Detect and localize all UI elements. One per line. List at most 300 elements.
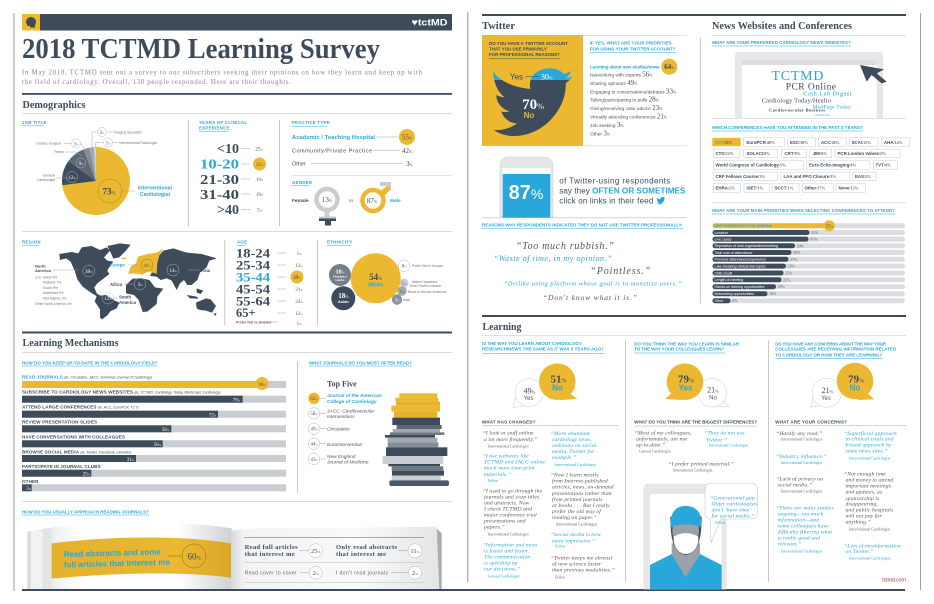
panel: reasons not to use twitter: “Too much rubbish.”	[516, 241, 614, 252]
panel: twitter priorities: 64%	[664, 63, 675, 71]
panel: conference priorities	[712, 208, 905, 303]
quotes: on Twitter.”	[846, 549, 874, 555]
panel: years of clinical experience: 19%	[256, 178, 264, 183]
panel: learning column 1: IS THE WAY YOU LEARN ABOUT CARDIOLOGY	[482, 341, 582, 346]
panel: practice type: 3%	[406, 160, 414, 168]
panel: learning column 3: DO YOU HAVE ANY CONCERNS ABOUT THE WAY YOUR	[775, 341, 887, 346]
bar chart: 31%	[127, 458, 135, 463]
panel: reasons not to use twitter: “Don't know what it is.”	[543, 293, 637, 302]
callout: speech bubble: “Generational gap.	[710, 494, 756, 501]
quotes: our decisions.”	[484, 567, 520, 573]
bar chart: 90%	[258, 383, 266, 388]
rounded bar chart: Late-breaking clinical trial topics	[714, 264, 766, 268]
quotes: articles, news, on-demand	[552, 485, 614, 491]
panel: age: 24%	[295, 300, 303, 305]
rounded bar chart: 42%	[811, 230, 819, 235]
rounded bar chart: 41%	[810, 237, 818, 242]
panel: ethnicity: Other Pacific Islander	[409, 284, 442, 288]
quotes: a lot more frequently.”	[484, 436, 538, 443]
rounded bar chart: Live cases	[714, 238, 732, 242]
quotes: “There are many studies	[776, 504, 834, 511]
quotes: International Cardiologist	[709, 444, 749, 448]
heading: demographics: Demographics	[22, 100, 86, 111]
quotes: The communication	[484, 555, 530, 561]
panel: approach to reading journals: that interest me	[245, 551, 295, 558]
speech bubbles: 49 yes 51 no: No	[552, 384, 563, 392]
panel: journals top five: EuroIntervention	[327, 442, 363, 448]
quotes: “Lots of misinformation	[844, 542, 901, 549]
quotes: media, Twitter for	[552, 448, 595, 455]
pie chart: 73%	[102, 186, 116, 196]
conference tags: CTO/12%	[716, 151, 734, 156]
bar chart	[22, 377, 286, 492]
panel: age: 45-54	[236, 282, 271, 296]
panel: approach to reading journals: 60%	[187, 552, 201, 562]
illustration: laptop browser: MedPage Today	[813, 104, 851, 110]
conference tags: TCT/48%	[715, 140, 733, 145]
panel: region map: South 9%	[43, 286, 58, 290]
panel: approach to reading journals: Read abstracts and some	[64, 547, 162, 559]
panel: region map: America	[119, 300, 137, 305]
quotes: “Twitter keeps me abreast	[551, 554, 613, 561]
quotes: journals and scan titles	[483, 494, 539, 500]
panel: twitter priorities: Sharing opinions 49%	[590, 79, 638, 87]
callout: speech bubble: Fellow	[715, 521, 726, 525]
panel: region map: REGION	[22, 240, 41, 244]
panel: approach to reading journals: full articles that interest me	[64, 558, 171, 569]
panel: years of clinical experience: EXPERIENCE	[199, 126, 230, 130]
pie labels: 3%	[74, 142, 79, 148]
pie labels: 2%	[100, 131, 105, 136]
panel: phone 87 percent: click on links in their feed	[559, 196, 653, 206]
panel: conferences attended: WHICH CONFERENCES HAVE YOU ATTENDED IN THE PAST 3 YEARS?	[712, 125, 863, 130]
icon: twitter bird chart	[493, 68, 572, 136]
panel: keep up to date bars	[22, 360, 286, 492]
panel: approach to reading journals	[22, 509, 442, 589]
quotes: up-to-date.”	[636, 442, 665, 448]
panel: learning column 2: WHAT DO YOU THINK ARE THE BIGGEST DIFFERENCES?	[634, 419, 757, 424]
quotes: Interventional Cardiologist	[781, 549, 823, 553]
panel: twitter priorities: Networking with experts 56%	[590, 71, 653, 79]
panel: learning column 2	[634, 342, 757, 589]
panel: twitter account: DO YOU HAVE A TWITTER ACCOUNT	[489, 41, 568, 46]
panel: age: 35-44	[236, 270, 271, 284]
quotes: Interventional Cardiologist	[556, 523, 598, 527]
conference tags: JIM/6%	[812, 151, 827, 156]
panel: approach to reading journals: I don't read journals	[336, 570, 388, 576]
panel: approach to reading journals: 2%	[412, 570, 418, 577]
panel: twitter priorities: Other 3%	[590, 129, 611, 137]
panel: twitter priorities	[583, 35, 687, 146]
quotes: “Hardly any read.”	[776, 430, 822, 437]
callout: speech bubble	[705, 484, 757, 543]
quotes: Fellow	[488, 479, 499, 483]
quotes: “Lack of privacy on	[776, 476, 823, 483]
panel: keep up to date bars: BROWSE SOCIAL MEDIA (ie, Twitter, Facebook, LinkedIn)	[22, 449, 131, 454]
panel: twitter priorities: Engaging in conversations/debates 33%	[590, 87, 677, 95]
panel: practice type: Other	[292, 162, 306, 168]
panel: keep up to date bars: HAVE CONVERSATIONS WITH COLLEAGUES	[22, 434, 125, 439]
rounded bar chart: 22%	[785, 271, 793, 276]
panel: conference priorities: WHAT ARE YOUR MAIN PRIORITIES WHEN SELECTING CONFERENCES TO ATTEND?	[712, 208, 895, 213]
map labels	[53, 265, 200, 298]
rounded bar chart: Networking opportunities	[714, 292, 754, 296]
conference tags: SCAI/15%	[852, 140, 871, 145]
panel: age: 29%	[293, 276, 301, 281]
conference tags: ESC/30%	[790, 140, 808, 145]
bar chart: 72%	[209, 414, 217, 418]
bubble chart: 18%	[338, 292, 349, 300]
conference tags: PCR London Valves/5%	[838, 151, 886, 156]
quotes: Fellow	[555, 545, 566, 549]
logo: ♥tctMD	[412, 18, 448, 28]
panel: learning column 3: TO CARDIOLOGY OR HOW THEY ARE LEARNING?	[775, 352, 882, 357]
panel: learning column 3	[775, 341, 907, 583]
panel: gender: GENDER	[292, 180, 313, 185]
bubble chart: Asian	[338, 299, 349, 304]
panel: job title	[22, 120, 173, 215]
bubble chart: 1%	[402, 282, 407, 287]
panel: twitter priorities: FOR USING YOUR TWITTER ACCOUNT?	[590, 46, 676, 51]
conference tags: ACC/26%	[821, 140, 840, 145]
rounded bar chart	[712, 220, 905, 303]
rounded bar chart: Hands-on training opportunities	[714, 285, 765, 289]
panel: job title: JOB TITLE	[22, 120, 47, 125]
conference tags: CRT/8%	[784, 151, 801, 156]
panel: age: 65+	[236, 306, 256, 320]
pie labels: Cardiac Surgeon	[36, 142, 62, 146]
panel: twitter account: FOR PROFESSIONAL REASONS?	[489, 52, 560, 57]
panel: region map: 3%	[138, 283, 143, 288]
panel: age: 21%	[295, 288, 303, 293]
rounded bar chart: 23%	[788, 264, 796, 269]
panel: twitter priorities: Job seeking 3%	[590, 121, 624, 129]
conference tags	[712, 138, 909, 192]
quotes: to clinical trials and	[846, 437, 894, 443]
panel: ethnicity: ETHNICITY	[327, 240, 352, 244]
panel: ethnicity: Arab	[403, 298, 410, 302]
illustration: laptop browser: Cardiovascular Business	[769, 108, 825, 113]
rounded bar chart: Previous attendance/experience	[714, 258, 766, 262]
quotes: “Social media is now	[551, 531, 601, 538]
illustration: laptop browser: TCTMD	[772, 69, 824, 84]
pie chart: 9%	[79, 162, 84, 167]
pie labels: Cardiologist	[140, 192, 170, 198]
panel: reasons not to use twitter: “Dislike using platform whose goal is to monetize users.”	[504, 281, 682, 288]
panel: practice type: PRACTICE TYPE	[292, 120, 330, 125]
quotes: more impressive.”	[552, 538, 595, 544]
speech bubbles: 79 yes 21 no: No	[709, 396, 717, 402]
panel: region map: U.S.–West 4%	[35, 276, 57, 280]
quotes: Interventional Cardiologist	[849, 528, 891, 532]
icon: brain head	[26, 17, 36, 28]
panel: journals top five: 62%	[310, 397, 318, 402]
panel: gender: vs	[349, 199, 353, 204]
quotes: “Superficial approach	[844, 430, 897, 437]
bubble chart: 54%	[369, 272, 382, 282]
panel: phone 87 percent: say they OFTEN OR SOMETIMES	[559, 186, 686, 196]
panel: journals top five: 44%	[310, 442, 318, 448]
quotes: “Not enough time	[844, 471, 886, 478]
quotes: sponsorship is	[846, 496, 879, 502]
conference tags: EAS/2%	[855, 174, 871, 179]
conference tags: LAA and PFO Closure/3%	[784, 174, 836, 179]
illustration: doctor on tablet	[643, 484, 727, 589]
panel: approach to reading journals: that interest me	[336, 551, 386, 558]
panel: ethnicity: Native Hawaiian/	[412, 280, 437, 284]
panel: twitter priorities: Virtually attending conferences 21%	[590, 112, 668, 120]
quotes: is faster and faster.	[484, 548, 529, 555]
quotes: example.”	[552, 455, 576, 461]
icon: male symbol: 87%	[367, 197, 378, 205]
speech bubbles: 49 yes 51 no	[513, 363, 577, 408]
quotes: biased approach by	[846, 443, 892, 449]
quotes: information—and	[778, 517, 819, 524]
pie labels	[36, 128, 173, 198]
speech bubbles: 21 yes 79 no	[811, 363, 874, 407]
quotes: some news sites.”	[846, 448, 887, 454]
panel: learning column 2: DO YOU THINK THE WAY YOU LEARN IS SIMILAR	[634, 342, 740, 347]
header bar with logo	[22, 14, 452, 30]
quotes: from printed journals	[552, 496, 602, 503]
speech bubbles: 49 yes 51 no: Yes	[524, 396, 533, 402]
panel: age: 12%	[295, 312, 303, 317]
quotes: International Cardiologist	[673, 468, 713, 472]
panel: practice type: Community/Private Practice	[292, 148, 372, 154]
panel: journals top five: New England	[327, 454, 356, 460]
rounded bar chart: 39%	[796, 243, 804, 248]
bubble chart: 8%	[402, 265, 407, 270]
icon: female symbol: 13%	[322, 196, 333, 204]
pie labels: Interventional	[138, 186, 173, 192]
panel: learning column 2: TO THE WAY YOUR COLLEAGUES LEARN?	[634, 347, 724, 352]
panel: preferred news websites: WHAT ARE YOUR PREFERRED CARDIOLOGY NEWS WEBSITES?	[712, 40, 851, 45]
quotes: or books . . . But I really	[552, 503, 610, 509]
panel: twitter account	[482, 35, 583, 146]
quotes: is speeding up	[484, 561, 518, 567]
illustration: laptop browser: Cardiology Today/Healio	[762, 97, 831, 104]
quotes: “Most of my colleagues,	[634, 429, 692, 436]
conference tags: TVT/4%	[876, 163, 891, 168]
panel: journals top five: Circulation	[327, 426, 350, 432]
pie labels: 1%	[106, 142, 111, 146]
panel: learning column 1: RESEARCH/NEWS THE SAME AS IT WAS 5 YEARS AGO?	[482, 347, 604, 352]
rounded bar chart: 16%	[769, 291, 777, 296]
quotes: “Industry influence.”	[776, 453, 827, 460]
quotes: unfortunately, are not	[636, 436, 687, 443]
quotes: Interventional Cardiologist	[555, 463, 597, 467]
panel: years of clinical experience: <10	[217, 142, 239, 157]
speech bubbles: 79 yes 21 no: 21%	[707, 386, 719, 395]
quotes: Fellow	[555, 575, 566, 579]
title: 2018 TCTMD Learning Survey	[22, 34, 380, 65]
panel: region map: Other North America 4%	[35, 302, 72, 306]
panel: region map: 12%	[104, 297, 112, 302]
speech bubbles: 79 yes 21 no: 79%	[678, 373, 694, 385]
pie labels: Interventional Radiologist	[119, 141, 157, 145]
panel: approach to reading journals: Read cover to cover	[245, 570, 297, 576]
quotes: presentations rather than	[551, 491, 612, 497]
panel: region map	[22, 240, 217, 319]
illustration: laptop browser: Cath Lab Digest	[803, 91, 852, 98]
quotes: and money to attend	[846, 478, 893, 484]
quotes: important meetings	[846, 484, 891, 490]
rounded bar chart: CME credit	[714, 271, 732, 275]
panel: twitter account: Yes	[510, 72, 523, 82]
quotes: much more than print	[484, 466, 535, 472]
panel: age: Prefer Not to Answer	[236, 320, 272, 324]
panel: keep up to date bars: OTHER	[22, 479, 39, 484]
quotes: “I prefer printed material.”	[668, 460, 734, 467]
bubble chart: Hispanic/	[333, 274, 347, 278]
panel: phone 87 percent: of Twitter-using respondents	[559, 176, 670, 186]
speech bubbles: 79 yes 21 no: Yes	[679, 384, 693, 393]
callout: speech bubble: Older cardiologists	[712, 502, 757, 508]
quotes: Interventional Cardiologist	[781, 490, 823, 494]
panel: journals top five	[308, 360, 449, 486]
panel: age: 18-24	[236, 246, 271, 260]
pie labels: Imaging Specialist	[114, 130, 142, 134]
quotes: major conference trial	[484, 512, 537, 519]
quotes: Twitter.”	[706, 437, 727, 443]
intro text: the field of cardiology. Overall, 130 people responded. Here are their thoughts.	[22, 78, 291, 86]
panel: years of clinical experience: 25%	[255, 148, 263, 152]
conference tags: CRF Fellows Course/3%	[716, 174, 765, 179]
quotes: is really good and	[778, 535, 820, 541]
panel: approach to reading journals: HOW DO YOU USUALLY APPROACH READING JOURNALS?	[22, 509, 149, 514]
panel: twitter account: No	[524, 111, 534, 120]
bar chart: 25%	[83, 472, 91, 478]
intro text	[22, 68, 422, 86]
heading: news websites and conferences: News Websites and Conferences	[712, 21, 852, 32]
panel: keep up to date bars: SUBSCRIBE TO CARDIOLOGY NEWS WEBSITES (ie, TCTMD, Cardiology Today, Medscape Cardiology)	[22, 390, 220, 395]
panel: journals top five: 43%	[310, 458, 318, 463]
quotes: of new science faster	[552, 560, 602, 567]
rounded bar chart: Length of meeting	[714, 278, 743, 282]
rounded bar chart: 4%	[732, 298, 738, 303]
speech bubbles: 49 yes 51 no: 51%	[550, 374, 567, 386]
conference tags: AHA/14%	[884, 140, 903, 145]
heading: learning mechanisms: Learning Mechanisms	[22, 338, 118, 349]
footer url: tctmd.com	[882, 577, 906, 583]
panel: journals top five: College of Cardiology	[327, 399, 377, 405]
panel: journals top five: Top Five	[327, 379, 357, 388]
quotes: will not pay for	[846, 513, 882, 520]
quotes: prefer the old way of	[551, 508, 602, 515]
panel: approach to reading journals: 2%	[313, 570, 319, 577]
panel: years of clinical experience: 10-20	[200, 158, 239, 172]
quotes: social media.”	[778, 483, 812, 489]
quotes	[634, 429, 749, 472]
rounded bar chart: Location	[714, 231, 728, 235]
rounded bar chart: 18%	[778, 284, 786, 289]
speech bubbles: 21 yes 79 no: No	[850, 384, 860, 393]
quotes: Interventional Cardiologist	[488, 444, 530, 448]
conference tags: None/13%	[838, 186, 859, 191]
quotes: “I use websites like	[483, 453, 529, 460]
panel: region map: Midwest 7%	[43, 280, 61, 284]
panel: preferred news websites	[712, 40, 887, 118]
panel: gender: Female	[292, 198, 309, 204]
bar chart: 58%	[162, 428, 170, 433]
heading: learning: Learning	[482, 322, 522, 333]
panel: region map: America	[35, 268, 52, 273]
quotes: TCTMD and JACC online	[484, 459, 545, 465]
conference tags: Euro Echo-Imaging/4%	[809, 163, 856, 168]
panel: twitter account: 30%	[541, 72, 553, 82]
panel: journals top five: WHAT JOURNALS DO YOU MOST OFTEN READ?	[309, 360, 412, 365]
quotes: reading on paper.”	[552, 515, 597, 521]
bubble chart: White	[368, 282, 383, 288]
panel: gender	[292, 180, 401, 226]
panel: learning column 3: WHAT ARE YOUR CONCERNS?	[775, 419, 847, 424]
panel: reasons not to use twitter: “Pointless.”	[590, 266, 651, 277]
quotes: General Cardiologist	[488, 575, 520, 579]
bar chart: 56%	[154, 443, 162, 448]
panel: conferences attended	[712, 125, 909, 192]
speech bubbles: 49 yes 51 no: 49%	[524, 386, 536, 395]
panel: twitter priorities: Learning about new studies/news	[590, 64, 660, 69]
panel: age: 25-34	[236, 258, 271, 272]
quotes: Interventional Cardiologist	[849, 456, 891, 460]
icon: cursor arrow	[860, 65, 887, 83]
quotes: “I look at stuff online	[483, 429, 534, 436]
pie labels: Fellow	[54, 150, 64, 154]
speech bubbles: 79 yes 21 no	[665, 363, 729, 407]
panel: approach to reading journals: Read full articles	[245, 544, 298, 551]
panel: years of clinical experience	[199, 120, 266, 218]
panel: practice type: 55%	[402, 134, 413, 142]
illustration: laptop browser: cardiovasc	[814, 113, 830, 117]
quotes: materials.”	[484, 472, 511, 478]
panel: age: AGE	[237, 240, 247, 244]
panel: journals top five: Journal of the American	[327, 393, 382, 399]
quotes: disappearing,	[846, 502, 878, 508]
conference tags: ISET/1%	[746, 186, 763, 191]
icon: phone	[500, 157, 553, 218]
panel: reasons not to use twitter: REASONS WHY RESPONDENTS INDICATED THEY DO NOT USE TWITTER PROFESSIONALLY:	[482, 223, 683, 228]
quotes: and abstracts. Now	[484, 501, 530, 507]
conference tags: World Congress of Cardiology/5%	[716, 163, 786, 168]
panel: region map: North	[35, 264, 46, 268]
quotes: presentations and	[483, 519, 526, 525]
quotes: cardiology news,	[552, 437, 592, 443]
quotes: and updates, as	[846, 490, 882, 496]
illustration: stack of books	[383, 393, 449, 486]
panel: reasons not to use twitter	[482, 223, 683, 302]
panel: gender: Male	[390, 198, 401, 204]
quotes: Interventional Cardiologist	[488, 533, 530, 537]
panel: age: 1%	[297, 252, 302, 257]
panel: years of clinical experience: 19%	[256, 193, 264, 198]
speech bubbles: 21 yes 79 no: 79%	[848, 373, 864, 385]
illustration: laptop browser	[735, 52, 887, 118]
panel: journals top five: JACC: Cardiovascular	[326, 408, 375, 414]
bubble chart: 3%	[395, 298, 400, 304]
panel: phone 87 percent	[500, 157, 686, 218]
icon: phone: 87%	[509, 182, 543, 204]
quotes: and public hospitals	[846, 508, 893, 514]
quotes: Interventional Cardiologist	[781, 461, 823, 465]
panel: twitter priorities: Taking/participating in polls 28%	[590, 96, 660, 104]
panel: keep up to date bars: HOW DO YOU KEEP UP-TO-DATE IN THE CARDIOLOGY FIELD?	[22, 360, 158, 365]
quotes: “Information and news	[483, 542, 537, 549]
panel: practice type: Academic / Teaching Hospital	[292, 135, 375, 141]
intro text: In May 2018, TCTMD sent out a survey to our subscribers seeking their opinions on how they learn and keep up with	[22, 68, 422, 76]
panel: years of clinical experience: 5%	[257, 208, 263, 214]
panel: region map: 14%	[169, 269, 177, 274]
panel: region map: 38%	[85, 270, 93, 275]
